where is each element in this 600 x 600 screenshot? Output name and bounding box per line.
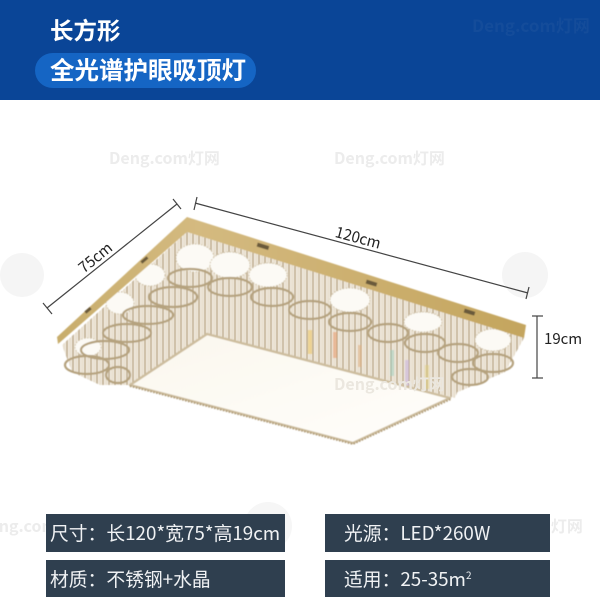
upper glow cylinders [75,244,511,356]
dimension: 120cm [194,197,529,299]
header watermark: Deng.com灯网 [472,12,590,37]
lamp [57,217,526,444]
beaded lower edge [130,386,451,444]
colour reflections [308,330,429,389]
dimension: 75cm: 75cm [74,237,117,278]
dimension: 19cm: 19cm [544,328,582,349]
dimension: 120cm: 120cm [333,221,383,254]
watermarks: Deng.com灯网 [472,513,583,537]
header band [0,0,600,100]
watermarks [0,145,583,550]
watermarks: Deng.com灯网 [334,145,445,169]
spec: material [46,560,285,597]
spec: light source: 光源：LED*260W [344,519,490,546]
spec: applicable area: 适用：25-35m2 [344,565,472,592]
spec: applicable area [325,560,550,597]
crystal body [62,232,524,398]
panel watermark: Deng.com灯网 [334,371,445,395]
gold ceiling plate [57,217,526,344]
spec: size: 尺寸：长120*宽75*高19cm [50,519,280,546]
S-shaped rings [65,269,513,385]
spec: material: 材质：不锈钢+水晶 [50,565,211,592]
plate vents [84,243,475,316]
dimension: 19cm [532,316,582,378]
spec: light source [325,514,550,552]
subtitle pill: 全光谱护眼吸顶灯 [50,52,246,87]
dimension: 75cm [43,199,181,314]
spec: size [46,514,285,552]
watermarks: Deng.com灯网 [109,145,220,169]
glass panel [130,334,450,443]
title: 长方形 [50,12,120,46]
